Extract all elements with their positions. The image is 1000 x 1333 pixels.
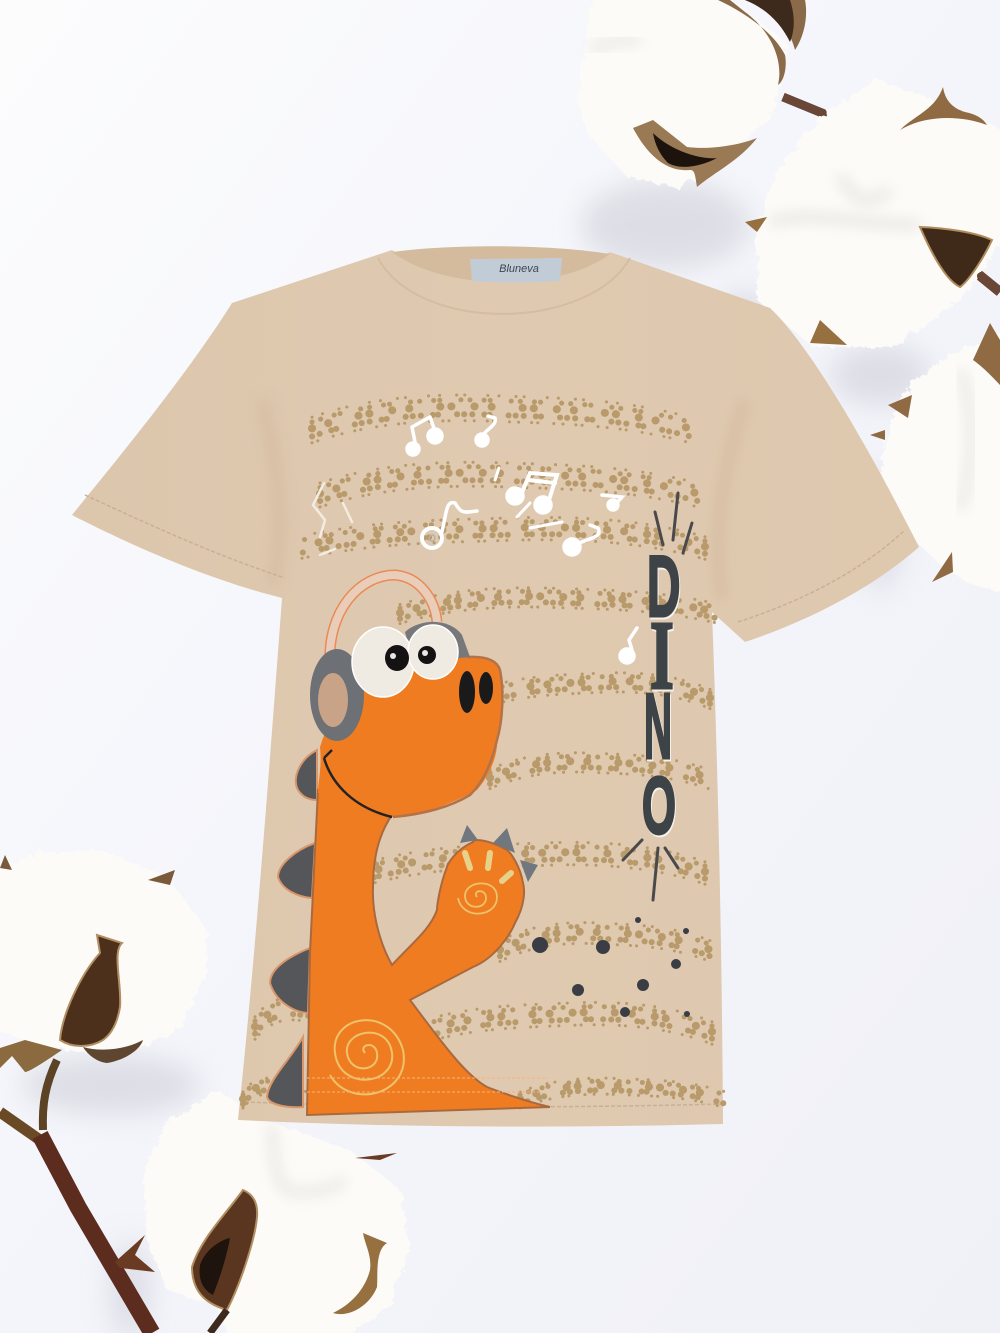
top calyx (900, 87, 987, 130)
lettering rays (623, 493, 692, 900)
dino lettering: D (647, 537, 680, 635)
hem stitching (307, 1078, 548, 1092)
body (307, 790, 550, 1115)
branch (0, 1112, 40, 1140)
open pod (633, 120, 757, 187)
toe marks (465, 853, 511, 881)
eye glints (390, 650, 428, 659)
head (318, 640, 503, 817)
dino character (267, 575, 550, 1115)
cotton boll: bottom left (0, 850, 207, 1333)
collar inside (392, 246, 610, 282)
speckled print bands (243, 395, 726, 1108)
back spikes (267, 750, 317, 1107)
right pod (920, 227, 992, 287)
sleeve shading (262, 400, 745, 600)
crease (590, 40, 640, 50)
left eye (352, 627, 414, 697)
dino lettering: I (650, 600, 674, 710)
small sepals (745, 217, 847, 345)
nostrils (459, 671, 475, 713)
fluff (577, 0, 787, 187)
right eye (408, 625, 458, 679)
eye brow patch (405, 622, 470, 660)
head outline (393, 657, 502, 817)
pod (192, 1190, 257, 1310)
fluff (0, 850, 207, 1053)
creases (960, 370, 971, 510)
headphone cup (310, 649, 364, 741)
sepals (870, 323, 1000, 582)
sepals (0, 1040, 62, 1072)
cotton boll: top right (745, 80, 1000, 347)
dino lettering: O (642, 760, 676, 850)
pupils (385, 645, 436, 671)
charcoal dots (532, 917, 690, 1017)
stub (210, 1310, 227, 1333)
headphone pad (318, 673, 348, 727)
dino lettering (642, 537, 680, 850)
headphones band inner (330, 575, 437, 665)
cotton shadows (20, 180, 930, 1333)
hem stitches (85, 495, 905, 1107)
headphones band (330, 575, 437, 665)
small sepal bits (115, 1153, 397, 1272)
collar rib (378, 258, 630, 314)
cotton boll: right (870, 323, 1000, 591)
dino lettering: N (644, 674, 672, 779)
paw spiral (458, 883, 497, 914)
fluff (143, 1090, 410, 1333)
stem (783, 97, 827, 115)
shirt body and sleeves (72, 250, 919, 1127)
nostril right (479, 672, 493, 704)
smile (324, 750, 392, 817)
calyx (718, 0, 806, 85)
creases (770, 175, 920, 225)
fluff (882, 330, 1000, 591)
stem (973, 270, 1000, 292)
tummy spiral (330, 1020, 404, 1094)
pod (60, 935, 122, 1046)
neck label: Bluneva (499, 263, 539, 275)
t-shirt (72, 246, 919, 1127)
fluff (757, 80, 1000, 347)
paw claws (460, 825, 538, 882)
right calyx (333, 1233, 387, 1314)
cotton boll: top centre (577, 0, 827, 187)
cotton boll: bottom centre (115, 1090, 410, 1333)
music notes (313, 416, 637, 663)
crease (272, 1125, 345, 1192)
neck label (470, 258, 562, 282)
